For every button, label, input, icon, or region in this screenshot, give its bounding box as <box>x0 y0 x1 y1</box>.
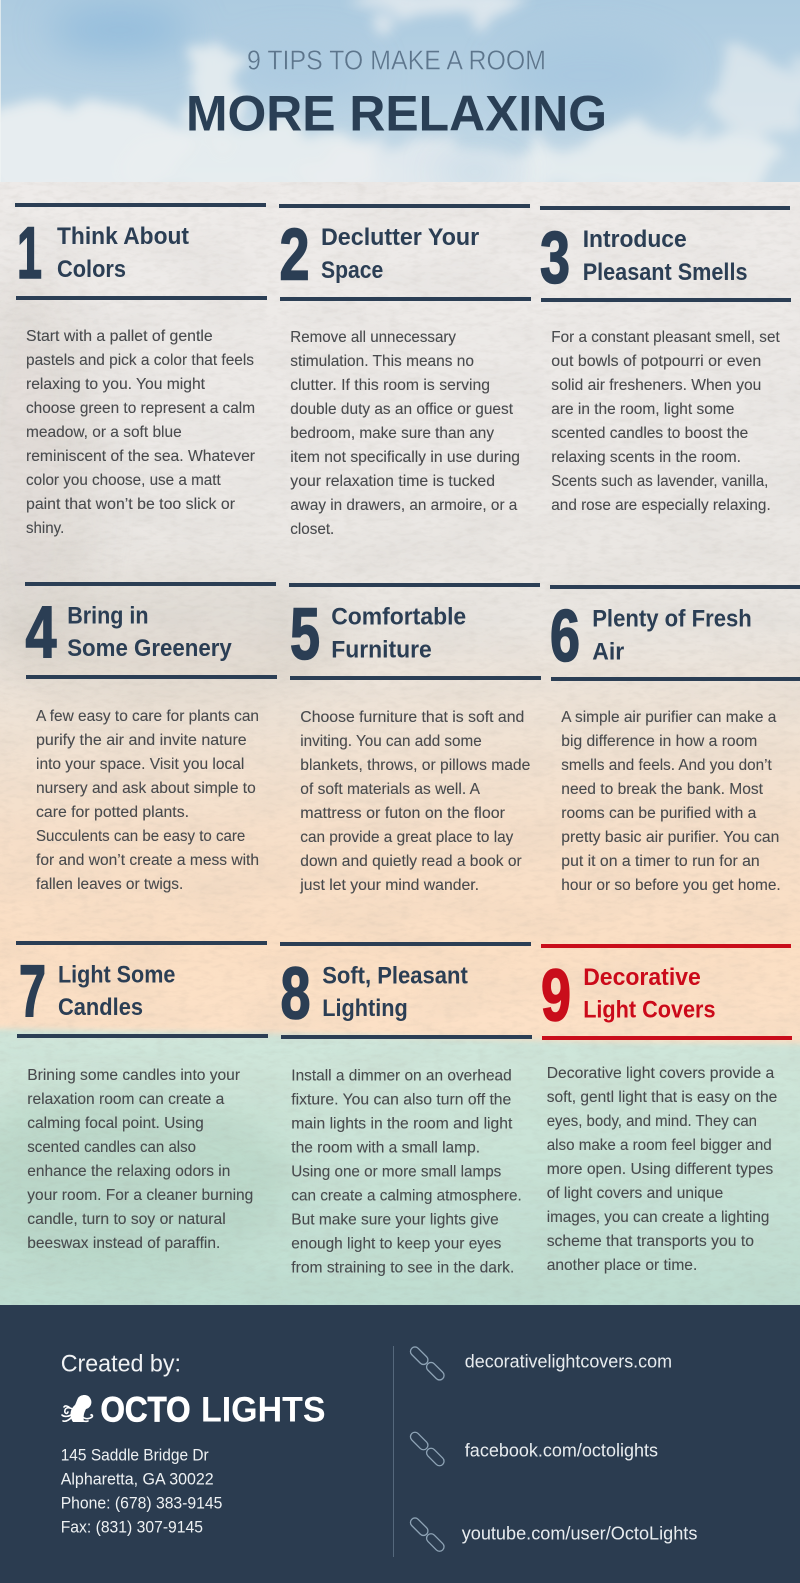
body text: tip 1: pastels and pick a color that feels <box>26 352 254 369</box>
number 4: 4 <box>26 592 57 674</box>
body text: tip 4: for and won’t create a mess with <box>36 852 259 869</box>
body text: tip 5: down and quietly read a book or <box>300 853 522 870</box>
body text: tip 6 <box>561 709 781 894</box>
body text: tip 7: candle, turn to soy or natural <box>27 1211 226 1228</box>
body text: tip 6: big difference in how a room <box>561 733 757 750</box>
heading: plenty of fresh air <box>592 606 752 665</box>
panel: tip 7 light some candles <box>16 941 268 1252</box>
title <box>186 44 607 142</box>
body text: tip 5: just let your mind wander. <box>299 877 479 894</box>
body text: tip 7: enhance the relaxing odors in <box>27 1163 230 1180</box>
heading: plenty of fresh air: Air <box>592 638 624 665</box>
number 5: 5 <box>290 594 320 675</box>
number 9: 9 <box>541 956 571 1036</box>
body text: tip 2: clutter. If this room is serving <box>290 377 490 394</box>
body text: tip 8: the room with a small lamp. <box>291 1140 480 1157</box>
body text: tip 3: For a constant pleasant smell, set <box>551 329 780 346</box>
body text: tip 8: main lights in the room and light <box>291 1116 513 1133</box>
panel: tip 8 soft pleasant lighting <box>280 942 532 1277</box>
link row: facebook <box>409 1430 658 1468</box>
body text: tip 5: of soft materials as well. A <box>300 781 480 798</box>
body text: tip 6: hour or so before you get home. <box>561 877 781 894</box>
body text: tip 7: your room. For a cleaner burning <box>27 1187 253 1204</box>
body text: tip 9: scheme that transports you to <box>547 1233 754 1250</box>
body text: tip 9: Decorative light covers provide a <box>547 1065 774 1082</box>
body text: tip 7 <box>27 1067 253 1252</box>
heading: comfortable furniture: Furniture <box>331 636 432 663</box>
body text: tip 8: from straining to see in the dark. <box>291 1260 514 1277</box>
heading: decorative light covers <box>583 964 716 1024</box>
body text: tip 4: into your space. Visit you local <box>36 756 244 773</box>
link row: facebook: facebook.com/octolights <box>465 1440 658 1461</box>
body text: tip 9: of light covers and unique <box>547 1185 723 1202</box>
body text: tip 7: Brining some candles into your <box>27 1067 241 1084</box>
panel: tip 6 plenty of fresh air <box>550 585 800 894</box>
body text: tip 4: fallen leaves or twigs. <box>36 876 183 893</box>
logo wordmark: LIGHTS <box>201 1390 326 1430</box>
body text: tip 1 <box>26 328 256 537</box>
heading: introduce pleasant smells: Pleasant Smells <box>583 259 748 286</box>
number 7: 7 <box>19 951 46 1032</box>
body text: tip 2: item not specifically in use during <box>290 449 520 466</box>
address block <box>61 1446 222 1537</box>
panel: footer <box>0 1305 800 1583</box>
panel: tip 1 think about colors <box>15 203 267 537</box>
heading: soft pleasant lighting <box>322 962 468 1022</box>
body text: tip 9: also make a room feel bigger and <box>547 1137 772 1154</box>
icon: chain link <box>409 1516 446 1553</box>
heading: introduce pleasant smells <box>583 226 748 286</box>
body text: tip 9: eyes, body, and mind. They can <box>547 1113 757 1130</box>
body text: tip 4: Succulents can be easy to care <box>36 828 245 845</box>
heading: bring in some greenery <box>67 603 232 662</box>
body text: tip 7: scented candles can also <box>27 1139 196 1156</box>
heading: decorative light covers: Decorative <box>583 964 701 991</box>
body text: tip 9 <box>547 1065 777 1274</box>
heading: introduce pleasant smells: Introduce <box>583 226 687 253</box>
body text: tip 8: enough light to keep your eyes <box>291 1236 501 1253</box>
body text: tip 8: Install a dimmer on an overhead <box>291 1068 512 1085</box>
body text: tip 8: can create a calming atmosphere. <box>291 1188 522 1205</box>
body text: tip 9: soft, gentl light that is easy on the <box>547 1089 777 1106</box>
link row: youtube <box>409 1516 697 1553</box>
body text: tip 9: images, you can create a lighting <box>547 1209 769 1226</box>
body text: tip 6: rooms can be purified with a <box>561 805 756 822</box>
body text: tip 2: your relaxation time is tucked <box>290 473 495 490</box>
body text: tip 3: relaxing scents in the room. <box>551 449 741 466</box>
body text: tip 5: mattress or futon on the floor <box>300 805 506 822</box>
body text: tip 4: purify the air and invite nature <box>36 732 247 749</box>
heading: bring in some greenery: Bring in <box>67 603 148 630</box>
body text: tip 1: shiny. <box>26 520 64 537</box>
body text: tip 2: Remove all unnecessary <box>290 329 456 346</box>
link row: website <box>409 1345 672 1382</box>
body text: tip 1: Start with a pallet of gentle <box>26 328 213 345</box>
panel: tip 9 decorative light covers <box>541 944 792 1274</box>
address block: Fax: (831) 307-9145 <box>61 1519 203 1537</box>
address block: Phone: (678) 383-9145 <box>61 1495 222 1513</box>
body text: tip 4: A few easy to care for plants can <box>36 708 259 725</box>
body text: tip 6: need to break the bank. Most <box>561 781 764 798</box>
address block: 145 Saddle Bridge Dr <box>61 1446 209 1464</box>
logo wordmark: OCTO <box>100 1390 190 1430</box>
body text: tip 8: Using one or more small lamps <box>291 1164 501 1181</box>
body text: tip 6: smells and feels. And you don’t <box>561 757 772 774</box>
panel: tip 3 introduce pleasant smells <box>540 206 791 514</box>
body text: tip 3: scented candles to boost the <box>551 425 748 442</box>
body text: tip 1: choose green to represent a calm <box>26 400 255 417</box>
body text: tip 1: meadow, or a soft blue <box>26 424 182 441</box>
body text: tip 7: relaxation room can create a <box>27 1091 224 1108</box>
body text: tip 2: away in drawers, an armoire, or a <box>290 497 517 514</box>
title line: 9 tips: 9 TIPS TO MAKE A ROOM <box>247 44 546 76</box>
body text: tip 3: solid air fresheners. When you <box>551 377 761 394</box>
body text: tip 7: calming focal point. Using <box>27 1115 204 1132</box>
link row: website: decorativelightcovers.com <box>465 1350 672 1371</box>
body text: tip 6: A simple air purifier can make a <box>561 709 776 726</box>
icon: chain link <box>409 1345 446 1382</box>
number 6: 6 <box>550 596 580 677</box>
heading: light some candles: Candles <box>58 994 143 1021</box>
title line: more relaxing: MORE RELAXING <box>186 86 607 142</box>
heading: decorative light covers: Light Covers <box>583 997 716 1024</box>
body text: tip 7: beeswax instead of paraffin. <box>27 1235 220 1252</box>
body text: tip 8 <box>291 1068 522 1277</box>
number 3: 3 <box>540 218 570 298</box>
body text: tip 5: Choose furniture that is soft and <box>300 709 524 726</box>
heading: light some candles: Light Some <box>58 961 175 988</box>
body text: tip 2: closet. <box>290 521 334 538</box>
body text: tip 3: Scents such as lavender, vanilla, <box>551 473 768 490</box>
panel: sky header background <box>0 0 800 205</box>
panel: tip 4 bring in some greenery <box>25 582 277 893</box>
heading: plenty of fresh air: Plenty of Fresh <box>592 606 752 633</box>
body text: tip 9: another place or time. <box>547 1257 697 1274</box>
body text: tip 2: bedroom, make sure than any <box>290 425 494 442</box>
heading: bring in some greenery: Some Greenery <box>67 635 232 662</box>
heading: declutter your space: Space <box>321 257 383 284</box>
body text: tip 3: are in the room, light some <box>551 401 734 418</box>
link row: youtube: youtube.com/user/OctoLights <box>462 1522 697 1543</box>
heading: light some candles <box>58 961 175 1021</box>
number 8: 8 <box>280 954 310 1034</box>
number 1: 1 <box>17 213 42 294</box>
body text: tip 2: double duty as an office or guest <box>290 401 514 418</box>
panel: textured paper background <box>0 182 800 1340</box>
body text: tip 5 <box>299 709 530 894</box>
body text: tip 5: can provide a great place to lay <box>300 829 513 846</box>
panel: tip 2 declutter your space <box>279 204 531 538</box>
heading: declutter your space <box>321 224 479 284</box>
body text: tip 1: reminiscent of the sea. Whatever <box>26 448 256 465</box>
body text: tip 3: out bowls of potpourri or even <box>551 353 761 370</box>
body text: tip 2: stimulation. This means no <box>290 353 474 370</box>
heading: think about colors: Colors <box>57 256 126 283</box>
created by label: Created by: <box>61 1351 181 1378</box>
body text: tip 1: relaxing to you. You might <box>26 376 206 393</box>
body text: tip 6: pretty basic air purifier. You can <box>561 829 779 846</box>
body text: tip 5: blankets, throws, or pillows made <box>300 757 530 774</box>
body text: tip 1: color you choose, use a matt <box>26 472 221 489</box>
body text: tip 3 <box>551 329 780 514</box>
body text: tip 6: put it on a timer to run for an <box>561 853 760 870</box>
logo: octo lights <box>62 1390 326 1430</box>
number 2: 2 <box>280 214 310 296</box>
body text: tip 4 <box>36 708 259 893</box>
heading: think about colors: Think About <box>57 223 189 250</box>
address block: Alpharetta, GA 30022 <box>61 1471 214 1489</box>
body text: tip 5: inviting. You can add some <box>300 733 482 750</box>
body text: tip 8: But make sure your lights give <box>291 1212 499 1229</box>
heading: comfortable furniture <box>331 604 466 663</box>
heading: declutter your space: Declutter Your <box>321 224 479 251</box>
body text: tip 3: and rose are especially relaxing. <box>551 497 771 514</box>
body text: tip 4: nursery and ask about simple to <box>36 780 256 797</box>
heading: soft pleasant lighting: Soft, Pleasant <box>322 962 468 989</box>
panel: tip 5 comfortable furniture <box>289 583 541 894</box>
heading: comfortable furniture: Comfortable <box>331 604 466 631</box>
body text: tip 9: more open. Using different types <box>547 1161 773 1178</box>
body text: tip 4: care for potted plants. <box>36 804 189 821</box>
heading: think about colors <box>57 223 189 283</box>
logo wordmark <box>100 1390 326 1430</box>
icon: chain link <box>409 1430 446 1468</box>
body text: tip 2 <box>290 329 520 538</box>
icon: octopus <box>62 1395 92 1422</box>
body text: tip 1: paint that won’t be too slick or <box>26 496 236 513</box>
body text: tip 8: fixture. You can also turn off the <box>291 1092 511 1109</box>
heading: soft pleasant lighting: Lighting <box>322 995 408 1022</box>
